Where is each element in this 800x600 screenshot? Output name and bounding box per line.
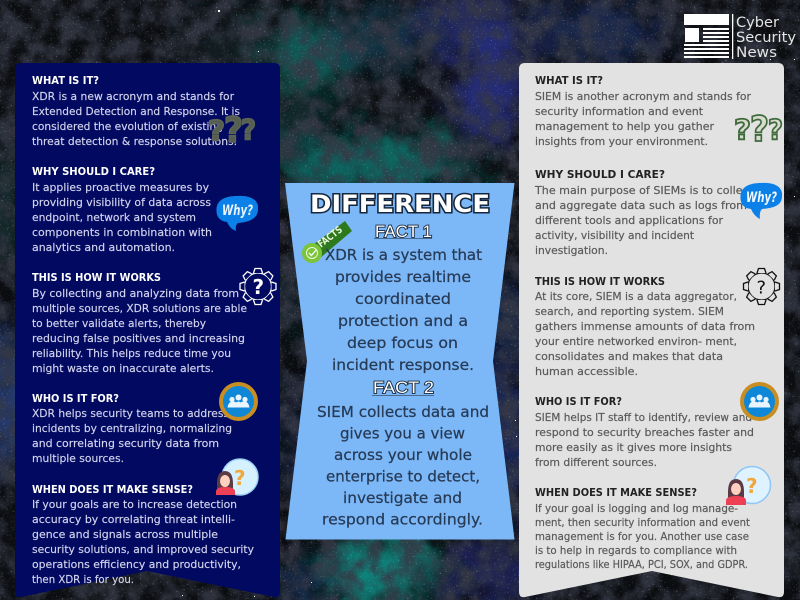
SIEM text: WHEN DOES IT MAKE SENSE?: [535, 486, 697, 499]
icon: question marks: ?: [224, 111, 243, 151]
SIEM text: and aggregate data such as logs from: [535, 199, 747, 212]
SIEM text: different tools and applications for: [535, 214, 723, 227]
XDR text: operations efficiency and productivity,: [32, 558, 241, 571]
SIEM text: ment, then security information and event: [535, 516, 751, 529]
icon: clock and person: [216, 459, 258, 495]
fact 2 text: gives you a view: [340, 424, 465, 442]
icon: question marks: ?: [208, 114, 225, 147]
icon: question marks: ?: [768, 113, 783, 146]
panel background: XDR ribbon: [15, 63, 280, 597]
SIEM text: WHO IS IT FOR?: [535, 395, 622, 408]
XDR text: analytics and automation.: [32, 241, 175, 254]
SIEM text: If your goal is logging and log manage-: [535, 502, 738, 515]
fact 2 text: investigate and: [343, 489, 462, 507]
icon: why speech bubble: [740, 183, 782, 219]
XDR text: multiple sources, XDR solutions are able: [32, 302, 247, 315]
icon: question marks: ?: [241, 113, 256, 146]
XDR text: WHAT IS IT?: [32, 74, 99, 87]
XDR text: WHEN DOES IT MAKE SENSE?: [32, 483, 193, 496]
XDR text: considered the evolution of existing: [32, 120, 223, 133]
SIEM text: more easily as it gives more insights: [535, 441, 732, 454]
XDR text: incidents by centralizing, normalizing: [32, 422, 232, 435]
XDR text: XDR is a new acronym and stands for: [32, 90, 234, 103]
icon: gear with question mark: ?: [756, 278, 766, 298]
SIEM text: from different sources.: [535, 456, 657, 469]
icon: question marks: ?: [750, 110, 769, 150]
SIEM text: respond to security breaches faster and: [535, 426, 754, 439]
SIEM text: consolidates and makes that data: [535, 350, 723, 363]
SIEM text: security information and event: [535, 105, 704, 118]
icon: question marks: [208, 111, 256, 151]
icon: clock and person: ?: [746, 474, 758, 498]
XDR text: reliability. This helps reduce time you: [32, 347, 231, 360]
icon: gear with question mark: [240, 268, 276, 304]
XDR text: It applies proactive measures by: [32, 181, 209, 194]
icon: gear with question mark: [744, 268, 780, 304]
subheading: Fact 1: FACT 1: [375, 222, 432, 241]
logo: Cyber Security News: [684, 14, 796, 61]
fact 1 text: provides realtime: [335, 268, 471, 286]
SIEM text: search, and reporting system. SIEM: [535, 305, 724, 318]
XDR text: gence and signals across multiple: [32, 528, 218, 541]
XDR text: providing visibility of data across: [32, 196, 211, 209]
XDR text: By collecting and analyzing data from: [32, 287, 239, 300]
panel: SIEM: [519, 63, 784, 597]
heading: Difference: DIFFERENCE: [310, 190, 490, 218]
XDR text: components in combination with: [32, 226, 212, 239]
XDR text: multiple sources.: [32, 452, 124, 465]
SIEM text: [534, 74, 755, 571]
SIEM text: is to help in regards to compliance with: [535, 544, 737, 557]
SIEM text: regulations like HIPAA, PCI, SOX, and GDPR.: [535, 558, 748, 571]
XDR text: might waste on inaccurate alerts.: [32, 362, 214, 375]
XDR text: and correlating security data from: [32, 437, 219, 450]
icon: clock and person: ?: [234, 466, 246, 490]
XDR text: endpoint, network and system: [32, 211, 196, 224]
SIEM text: insights from your environment.: [535, 135, 708, 148]
SIEM text: management to help you gather: [535, 120, 714, 133]
panel background: SIEM ribbon: [519, 63, 784, 597]
SIEM text: activity, visibility and incident: [535, 229, 695, 242]
fact 2 text: respond accordingly.: [322, 510, 483, 528]
icon: question marks: ?: [734, 113, 751, 146]
panel background: hourglass: [285, 183, 514, 540]
fact 1 text: deep focus on: [347, 334, 458, 352]
panel: XDR: [15, 63, 280, 597]
fact 1 text: incident response.: [332, 356, 474, 374]
subheading: Fact 2: FACT 2: [373, 378, 434, 397]
SIEM text: your entire networked environ- ment,: [535, 335, 737, 348]
SIEM text: WHAT IS IT?: [535, 74, 603, 87]
logo: Cyber Security News: Security: [736, 30, 796, 46]
XDR text: security solutions, and improved security: [32, 543, 254, 556]
fact 1 text: [325, 246, 482, 374]
SIEM text: gathers immense amounts of data from: [535, 320, 755, 333]
panel: Difference: [285, 183, 514, 540]
logo: Cyber Security News: News: [736, 45, 777, 61]
fact 2 text: across your whole: [334, 446, 472, 464]
XDR text: then XDR is for you.: [32, 573, 134, 586]
XDR text: THIS IS HOW IT WORKS: [32, 271, 161, 284]
XDR text: accuracy by correlating threat intelli-: [32, 513, 235, 526]
icon: gear with question mark: ?: [252, 275, 264, 299]
SIEM text: THIS IS HOW IT WORKS: [535, 275, 665, 288]
icon: why speech bubble: Why?: [746, 190, 777, 206]
SIEM text: The main purpose of SIEMs is to collect: [534, 184, 754, 197]
XDR text: to better validate alerts, thereby: [32, 317, 206, 330]
SIEM text: management is for you. Another use case: [535, 530, 749, 543]
icon: facts badge: FACTS: [316, 224, 345, 250]
icon: question marks: [734, 110, 783, 150]
SIEM text: SIEM is another acronym and stands for: [535, 90, 751, 103]
SIEM text: SIEM helps IT staff to identify, review and: [535, 411, 752, 424]
fact 1 text: XDR is a system that: [325, 246, 482, 264]
SIEM text: At its core, SIEM is a data aggregator,: [535, 290, 737, 303]
XDR text: Extended Detection and Response. It is: [32, 105, 240, 118]
icon: why speech bubble: Why?: [222, 203, 253, 219]
icon: team medal: [219, 382, 258, 421]
SIEM text: WHY SHOULD I CARE?: [535, 168, 665, 181]
icon: clock and person: [726, 466, 770, 505]
icon: team medal: [740, 382, 779, 421]
fact 2 text: SIEM collects data and: [317, 403, 489, 421]
fact 1 text: coordinated: [355, 290, 451, 308]
XDR text: reducing false positives and increasing: [32, 332, 245, 345]
XDR text: XDR helps security teams to address: [32, 407, 229, 420]
XDR text: If your goals are to increase detection: [32, 498, 237, 511]
fact 2 text: [317, 403, 489, 528]
XDR text: WHY SHOULD I CARE?: [32, 165, 155, 178]
icon: why speech bubble: [216, 196, 258, 231]
XDR text: threat detection & response solutions.: [32, 135, 237, 148]
icon: facts badge: [302, 221, 352, 263]
SIEM text: human accessible.: [535, 365, 638, 378]
XDR text: WHO IS IT FOR?: [32, 392, 119, 405]
fact 2 text: enterprise to detect,: [326, 468, 480, 486]
fact 1 text: protection and a: [338, 312, 468, 330]
SIEM text: investigation.: [535, 244, 608, 257]
logo: Cyber Security News: Cyber: [736, 15, 779, 31]
XDR text: [32, 74, 254, 586]
